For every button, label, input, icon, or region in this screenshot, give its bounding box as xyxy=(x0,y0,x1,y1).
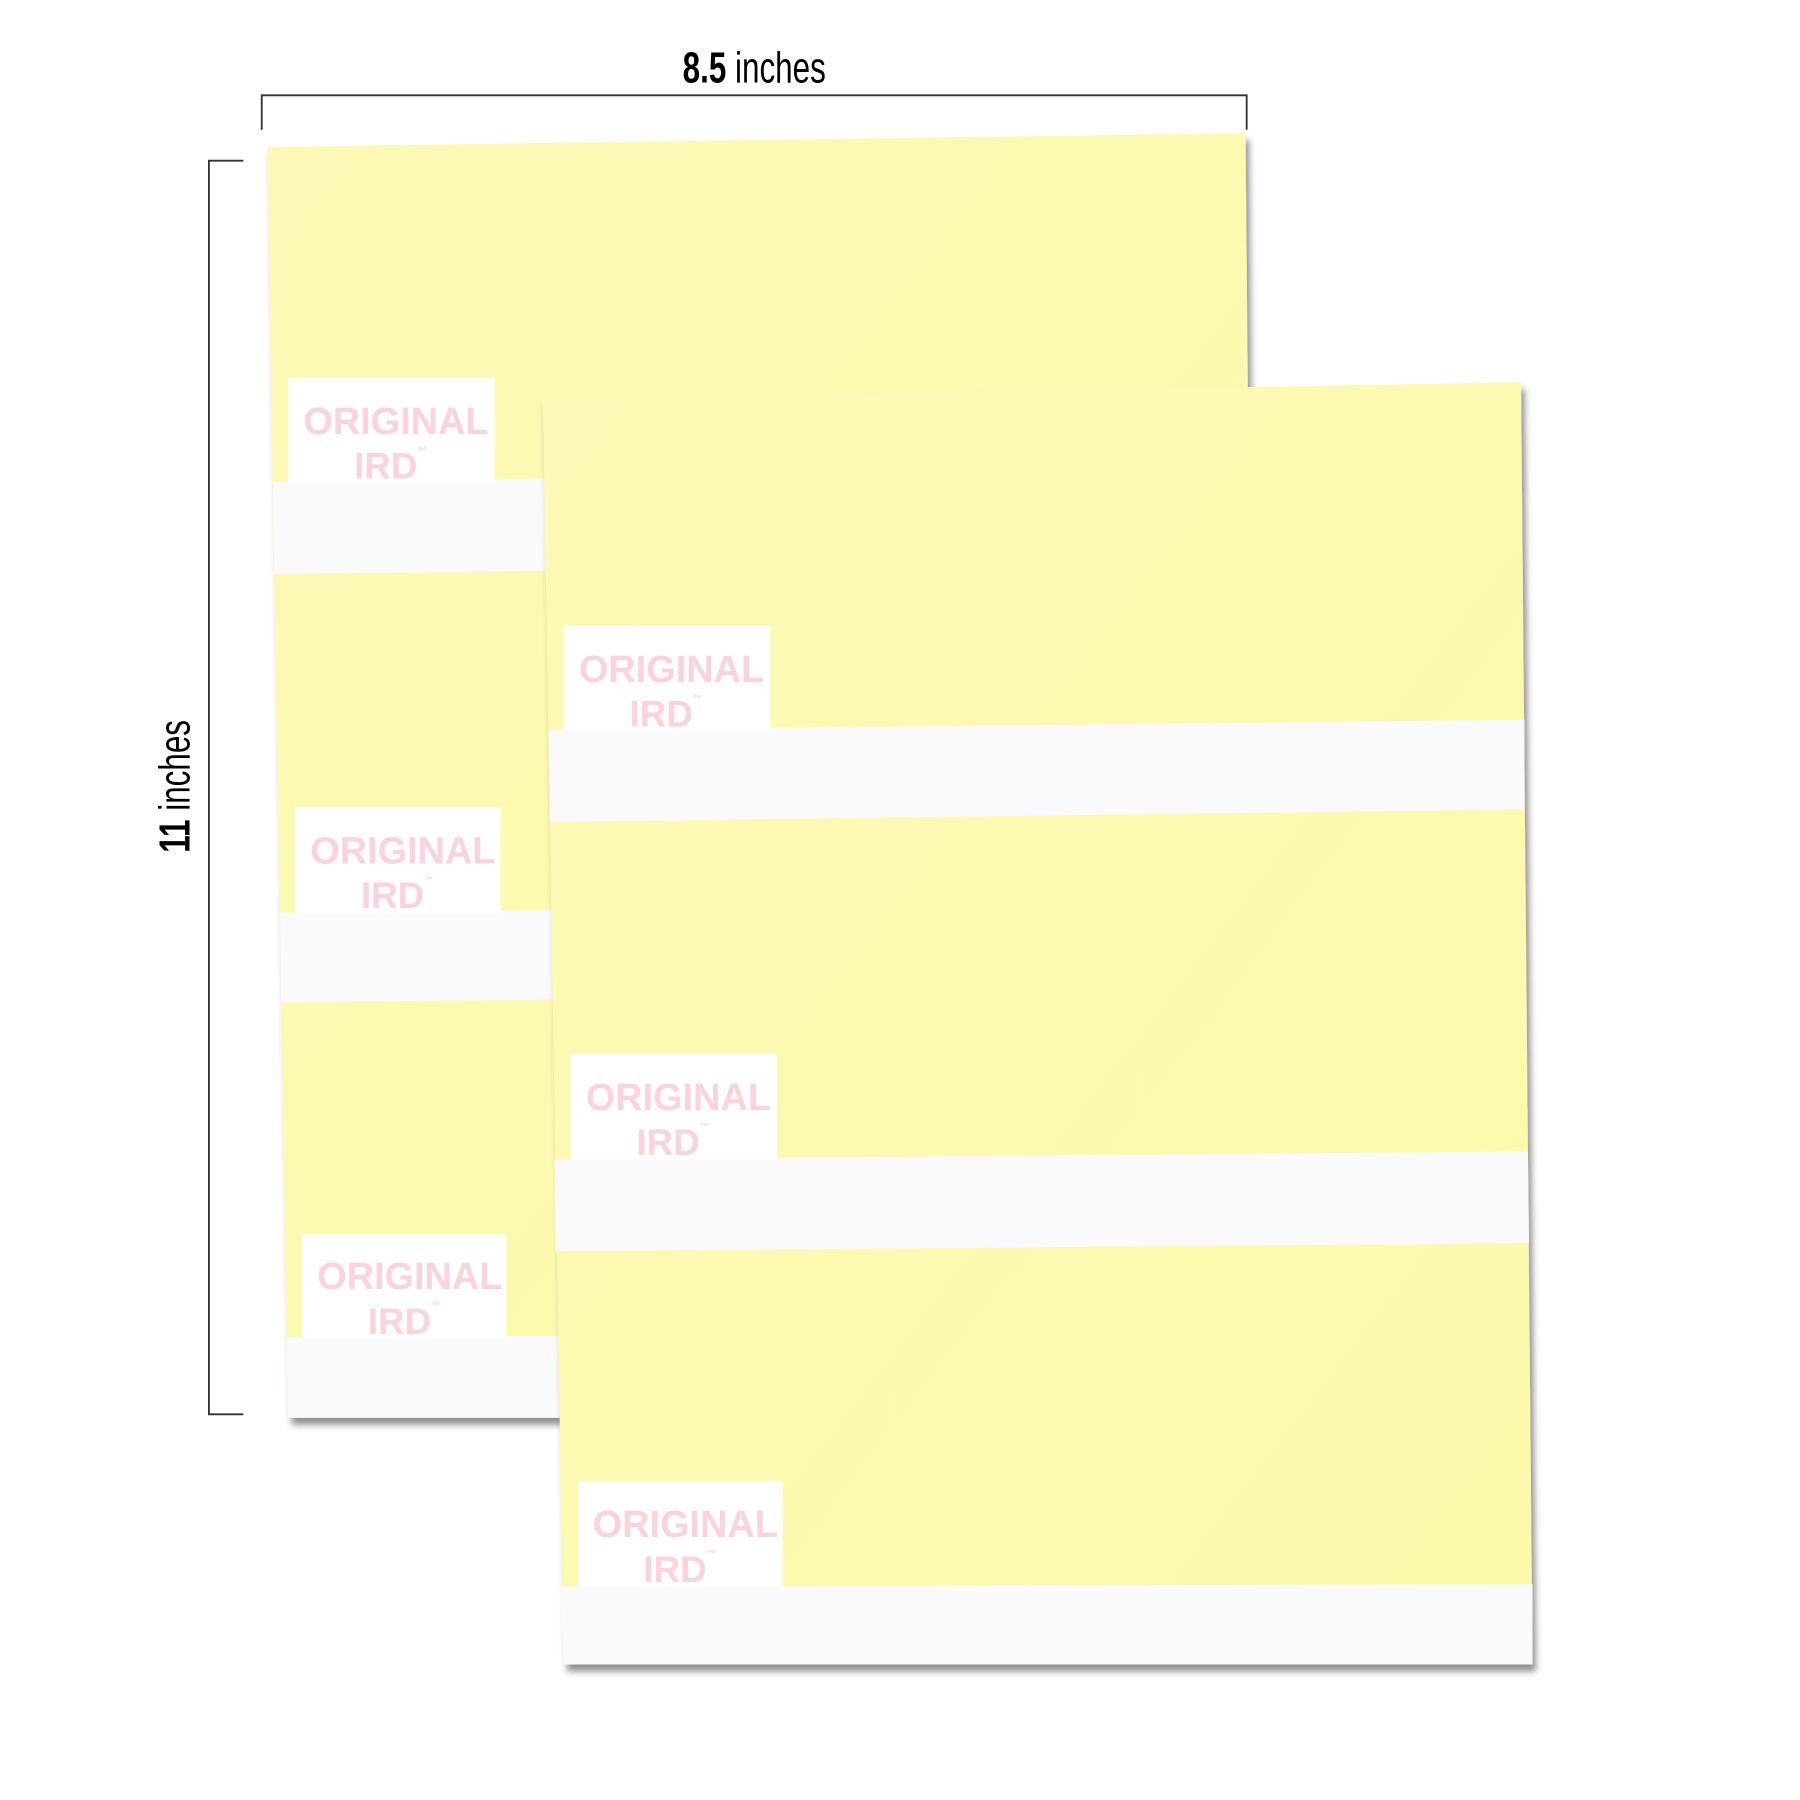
label: ORIGINAL IRD 2 xyxy=(571,1054,777,1163)
label: ORIGINAL IRD 1: ™ xyxy=(693,693,702,703)
label: ORIGINAL IRD 3 xyxy=(579,1481,783,1590)
label: ORIGINAL IRD 3: ORIGINAL xyxy=(317,1256,502,1298)
label: ORIGINAL IRD 3 xyxy=(302,1234,506,1342)
front sheet xyxy=(543,382,1533,1665)
label: ORIGINAL IRD 1: ORIGINAL xyxy=(303,401,489,443)
label: ORIGINAL IRD 3: IRD xyxy=(368,1301,431,1342)
label: ORIGINAL IRD 1: ORIGINAL xyxy=(579,649,764,691)
width label: 8.5 inches xyxy=(683,45,826,93)
label: ORIGINAL IRD 3: ™ xyxy=(431,1301,440,1311)
label: ORIGINAL IRD 2: IRD xyxy=(636,1122,700,1163)
height dimension bracket xyxy=(152,161,243,1414)
height label: 11 inches xyxy=(152,720,200,853)
label: ORIGINAL IRD 2: ™ xyxy=(700,1122,709,1132)
width dimension bracket xyxy=(262,45,1247,130)
label: ORIGINAL IRD 3: IRD xyxy=(643,1549,707,1590)
label: ORIGINAL IRD 2 xyxy=(295,807,501,916)
label: ORIGINAL IRD 3: ™ xyxy=(707,1549,716,1559)
label: ORIGINAL IRD 1 xyxy=(288,378,495,487)
label: ORIGINAL IRD 1: ™ xyxy=(417,445,427,455)
back sheet xyxy=(267,133,1257,1418)
label: ORIGINAL IRD 2: ORIGINAL xyxy=(310,830,496,872)
label: ORIGINAL IRD 2: ™ xyxy=(424,875,433,885)
label: ORIGINAL IRD 2: IRD xyxy=(361,875,424,916)
label: ORIGINAL IRD 2: ORIGINAL xyxy=(586,1077,771,1119)
label: ORIGINAL IRD 1 xyxy=(564,626,770,735)
label: ORIGINAL IRD 1: IRD xyxy=(630,694,693,735)
label: ORIGINAL IRD 1: IRD xyxy=(354,446,417,487)
label: ORIGINAL IRD 3: ORIGINAL xyxy=(593,1504,778,1546)
